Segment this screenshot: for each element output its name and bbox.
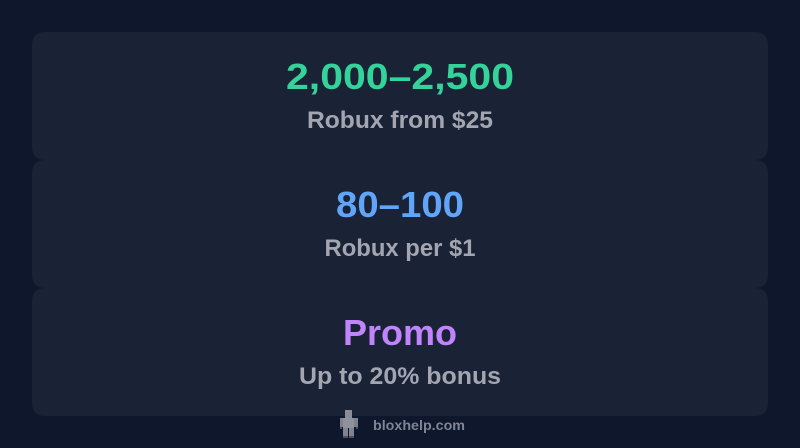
panel: Robux per $1 — [32, 160, 768, 288]
panel: Promo — [32, 288, 768, 416]
panel: Robux from $25 — [32, 32, 768, 160]
caption: Up to 20% bonus: Up to 20% bonus — [299, 363, 501, 390]
caption: Robux from $25: Robux from $25 — [307, 107, 493, 134]
stat: 2,000–2,500: 2,000–2,500 — [286, 56, 514, 97]
icon: blocky avatar — [340, 410, 358, 438]
brand text: bloxhelp.com — [373, 417, 465, 433]
caption: Robux per $1: Robux per $1 — [324, 235, 476, 262]
stat: 80–100: 80–100 — [336, 184, 464, 225]
stat: Promo: Promo — [343, 312, 457, 353]
footer brand — [340, 410, 465, 438]
